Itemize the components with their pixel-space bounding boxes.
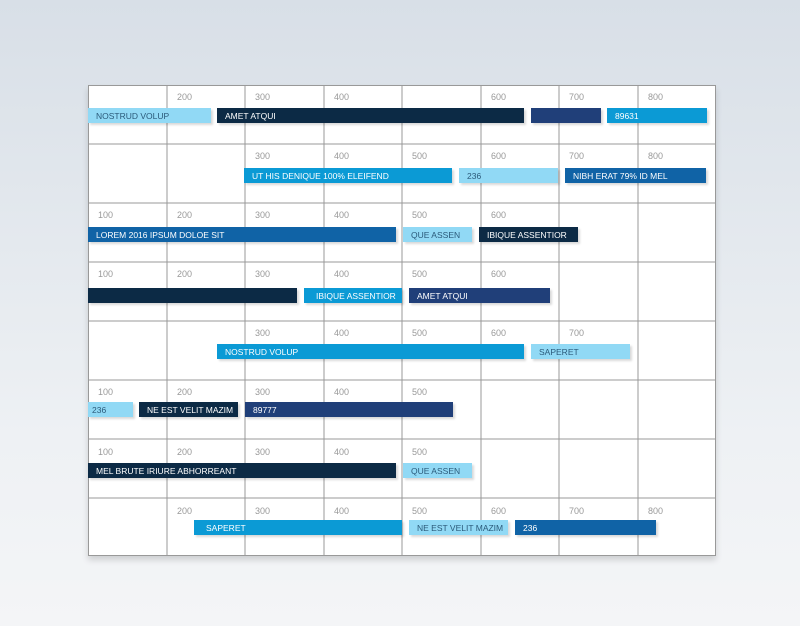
bars: MEL BRUTE IRIURE ABHORREANT	[96, 466, 236, 476]
axis numbers: 700	[569, 328, 584, 338]
axis numbers: 800	[648, 506, 663, 516]
axis numbers: 600	[491, 151, 506, 161]
axis numbers: 100	[98, 210, 113, 220]
axis numbers: 200	[177, 506, 192, 516]
bars: UT HIS DENIQUE 100% ELEIFEND	[252, 171, 389, 181]
axis numbers: 300	[255, 269, 270, 279]
axis numbers: 200	[177, 210, 192, 220]
bars: LOREM 2016 IPSUM DOLOE SIT	[96, 230, 224, 240]
axis numbers: 300	[255, 506, 270, 516]
axis numbers: 300	[255, 92, 270, 102]
axis numbers: 400	[334, 506, 349, 516]
bars: 89631	[615, 111, 639, 121]
axis numbers: 200	[177, 447, 192, 457]
axis numbers: 500	[412, 210, 427, 220]
axis numbers: 400	[334, 151, 349, 161]
bars: NOSTRUD VOLUP	[96, 111, 169, 121]
bars: SAPERET	[539, 347, 579, 357]
axis numbers: 200	[177, 269, 192, 279]
grid table	[88, 85, 716, 556]
axis numbers: 300	[255, 387, 270, 397]
axis numbers: 100	[98, 447, 113, 457]
axis numbers: 400	[334, 210, 349, 220]
bars: NE EST VELIT MAZIM	[147, 405, 233, 415]
bars: AMET ATQUI	[417, 291, 468, 301]
axis numbers: 800	[648, 151, 663, 161]
axis numbers: 700	[569, 151, 584, 161]
axis numbers: 500	[412, 387, 427, 397]
axis numbers: 300	[255, 151, 270, 161]
axis numbers: 400	[334, 387, 349, 397]
bars: NE EST VELIT MAZIM	[417, 523, 503, 533]
axis numbers: 600	[491, 210, 506, 220]
bars: IBIQUE ASSENTIOR	[316, 291, 396, 301]
axis numbers: 500	[412, 269, 427, 279]
axis numbers: 800	[648, 92, 663, 102]
axis numbers: 700	[569, 92, 584, 102]
axis numbers: 400	[334, 447, 349, 457]
axis numbers: 300	[255, 210, 270, 220]
axis numbers: 600	[491, 92, 506, 102]
bars: QUE ASSEN	[411, 466, 460, 476]
axis numbers: 300	[255, 447, 270, 457]
axis numbers: 500	[412, 328, 427, 338]
axis numbers: 500	[412, 447, 427, 457]
bars: 236	[467, 171, 481, 181]
axis numbers: 600	[491, 269, 506, 279]
bars: 236	[523, 523, 537, 533]
axis numbers: 500	[412, 506, 427, 516]
bars: QUE ASSEN	[411, 230, 460, 240]
bars: IBIQUE ASSENTIOR	[487, 230, 567, 240]
bars: NOSTRUD VOLUP	[225, 347, 298, 357]
bars: 89777	[253, 405, 277, 415]
axis numbers: 600	[491, 506, 506, 516]
axis numbers: 100	[98, 269, 113, 279]
axis numbers: 200	[177, 92, 192, 102]
bars: AMET ATQUI	[225, 111, 276, 121]
axis numbers: 300	[255, 328, 270, 338]
axis numbers: 200	[177, 387, 192, 397]
axis numbers: 400	[334, 328, 349, 338]
axis numbers: 600	[491, 328, 506, 338]
axis numbers: 400	[334, 92, 349, 102]
axis numbers: 100	[98, 387, 113, 397]
bars: SAPERET	[206, 523, 246, 533]
bars: NIBH ERAT 79% ID MEL	[573, 171, 668, 181]
axis numbers: 500	[412, 151, 427, 161]
bars: 236	[92, 405, 106, 415]
axis numbers: 700	[569, 506, 584, 516]
axis numbers: 400	[334, 269, 349, 279]
